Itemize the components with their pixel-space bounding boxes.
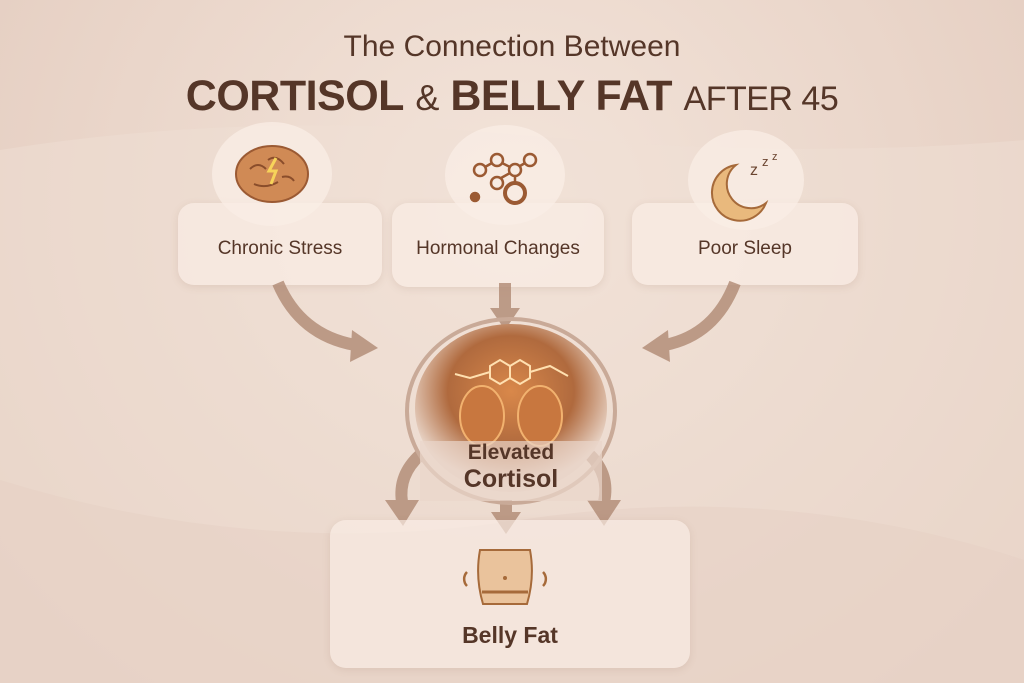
text: elevated cortisol: Elevated xyxy=(468,441,554,464)
panel: hormonal changes xyxy=(392,203,604,287)
text: chronic stress: Chronic Stress xyxy=(218,238,342,259)
text: poor sleep: Poor Sleep xyxy=(698,238,792,259)
text: hormonal changes: Hormonal Changes xyxy=(416,238,580,259)
icon: molecules xyxy=(445,125,565,225)
central cortisol circle xyxy=(405,317,617,505)
icon: belly xyxy=(462,549,548,605)
title: CORTISOL & BELLY FAT AFTER 45 xyxy=(186,72,838,120)
panel: poor sleep xyxy=(632,203,858,285)
panel: belly fat xyxy=(330,520,690,668)
text: belly fat: Belly Fat xyxy=(462,622,558,648)
icon: moon: z xyxy=(750,162,758,179)
icon: moon: z xyxy=(772,151,778,163)
title: The Connection Between xyxy=(344,30,680,63)
icon: moon: z xyxy=(762,154,768,169)
icon: brain xyxy=(212,122,332,226)
icon: moon xyxy=(688,130,804,230)
panel: chronic stress xyxy=(178,203,382,285)
text: elevated cortisol: Cortisol xyxy=(464,465,558,493)
title xyxy=(186,30,838,120)
text: elevated cortisol xyxy=(464,441,558,493)
